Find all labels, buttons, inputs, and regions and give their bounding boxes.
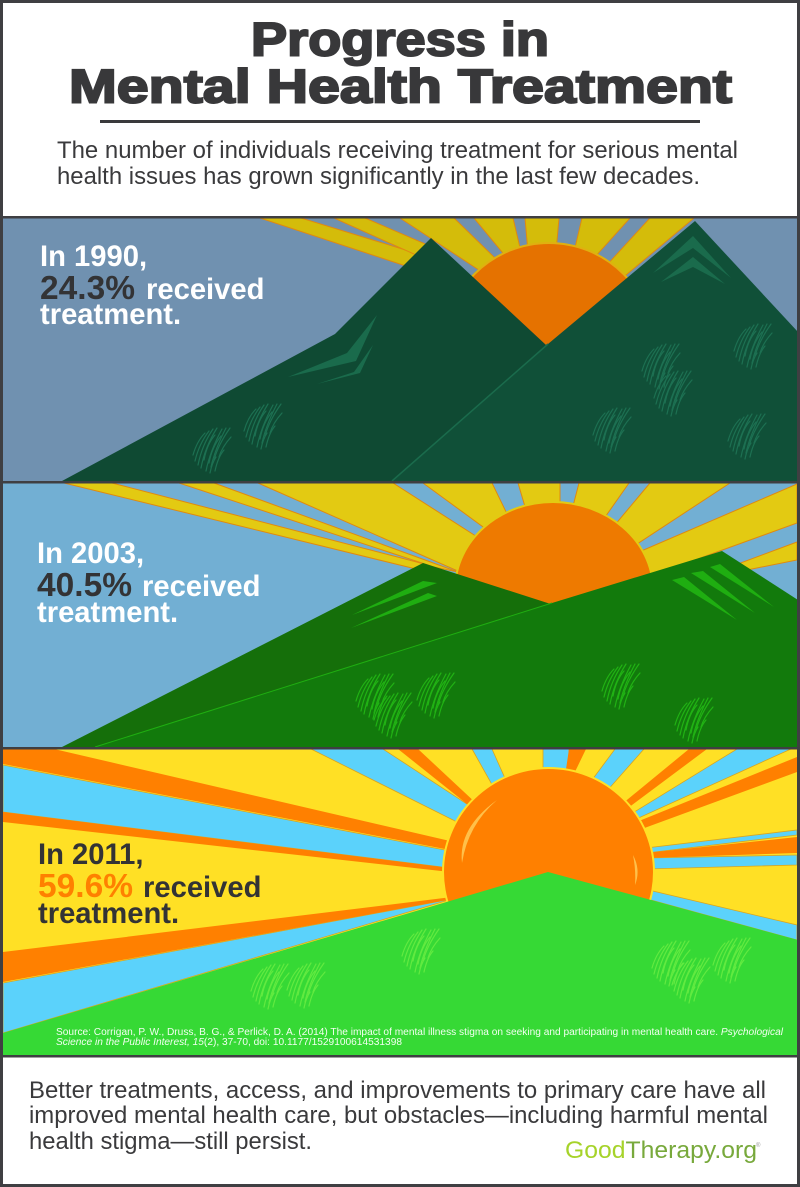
title rule	[100, 120, 700, 123]
label 2011: received	[143, 872, 261, 904]
title: Mental Health Treatment	[69, 60, 732, 112]
sun rays 2003	[64, 483, 797, 578]
mountain highlights 2003	[351, 564, 774, 628]
grass 1990	[193, 324, 772, 473]
panel: 2003	[0, 482, 800, 748]
sun highlights 2011	[462, 800, 638, 885]
panel: 1990	[0, 218, 800, 482]
source citation: Science in the Public Interest, 15(2), 37-70, doi: 10.1177/1529100614531398	[56, 1037, 402, 1048]
title	[69, 12, 732, 112]
label 2011: 59.6%	[38, 868, 133, 905]
ridge line 2003	[95, 603, 552, 747]
title: Progress in	[251, 12, 549, 66]
mountain highlights 1990	[288, 236, 731, 384]
orange rays 2011	[3, 749, 797, 982]
header panel	[0, 0, 800, 218]
logo: ®	[756, 1142, 761, 1149]
closing text: health stigma—still persist.	[29, 1128, 312, 1155]
left mountain 1990	[62, 238, 560, 481]
label 2003: treatment.	[37, 597, 178, 629]
closing text: improved mental health care, but obstacles—including harmful mental	[29, 1102, 768, 1129]
label 1990: received	[146, 274, 264, 306]
label 1990: In 1990,	[40, 241, 147, 273]
label 2003: 40.5%	[37, 567, 132, 604]
left mountain 2003	[62, 563, 560, 747]
label 2003: received	[142, 571, 260, 603]
hill 2011	[3, 872, 798, 1056]
sun rays 1990	[260, 218, 694, 280]
intro text: health issues has grown significantly in the last few decades.	[57, 163, 700, 190]
grass 2011	[251, 929, 751, 1009]
label 2003	[37, 538, 260, 629]
label 1990: treatment.	[40, 299, 181, 331]
label 2011: treatment.	[38, 898, 179, 930]
closing text	[29, 1077, 768, 1155]
intro text: The number of individuals receiving treatment for serious mental	[57, 137, 738, 164]
right mountain 2003	[95, 551, 798, 747]
intro text	[57, 137, 738, 190]
label 2011: In 2011,	[38, 839, 143, 871]
sun 2011	[443, 768, 654, 976]
label 2011	[38, 839, 261, 930]
label 2003: In 2003,	[37, 538, 144, 570]
source citation: Source: Corrigan, P. W., Druss, B. G., & Perlick, D. A. (2014) The impact of mental illness stigma on seeking and participating in mental health care. Psychological	[56, 1027, 784, 1038]
sun 1990	[444, 243, 654, 453]
source citation	[56, 1027, 784, 1048]
logo: GoodTherapy.org	[565, 1137, 757, 1164]
right mountain 1990	[392, 221, 798, 481]
cyan rays 2011	[3, 749, 797, 1033]
label 1990	[40, 241, 264, 331]
sun 2003	[455, 502, 653, 620]
ridge line 1990	[392, 344, 548, 481]
grass 2003	[356, 664, 713, 743]
closing text: Better treatments, access, and improvements to primary care have all	[29, 1077, 766, 1104]
footer panel	[0, 1056, 800, 1187]
panel: 2011	[0, 748, 800, 1056]
label 1990: 24.3%	[40, 270, 135, 307]
